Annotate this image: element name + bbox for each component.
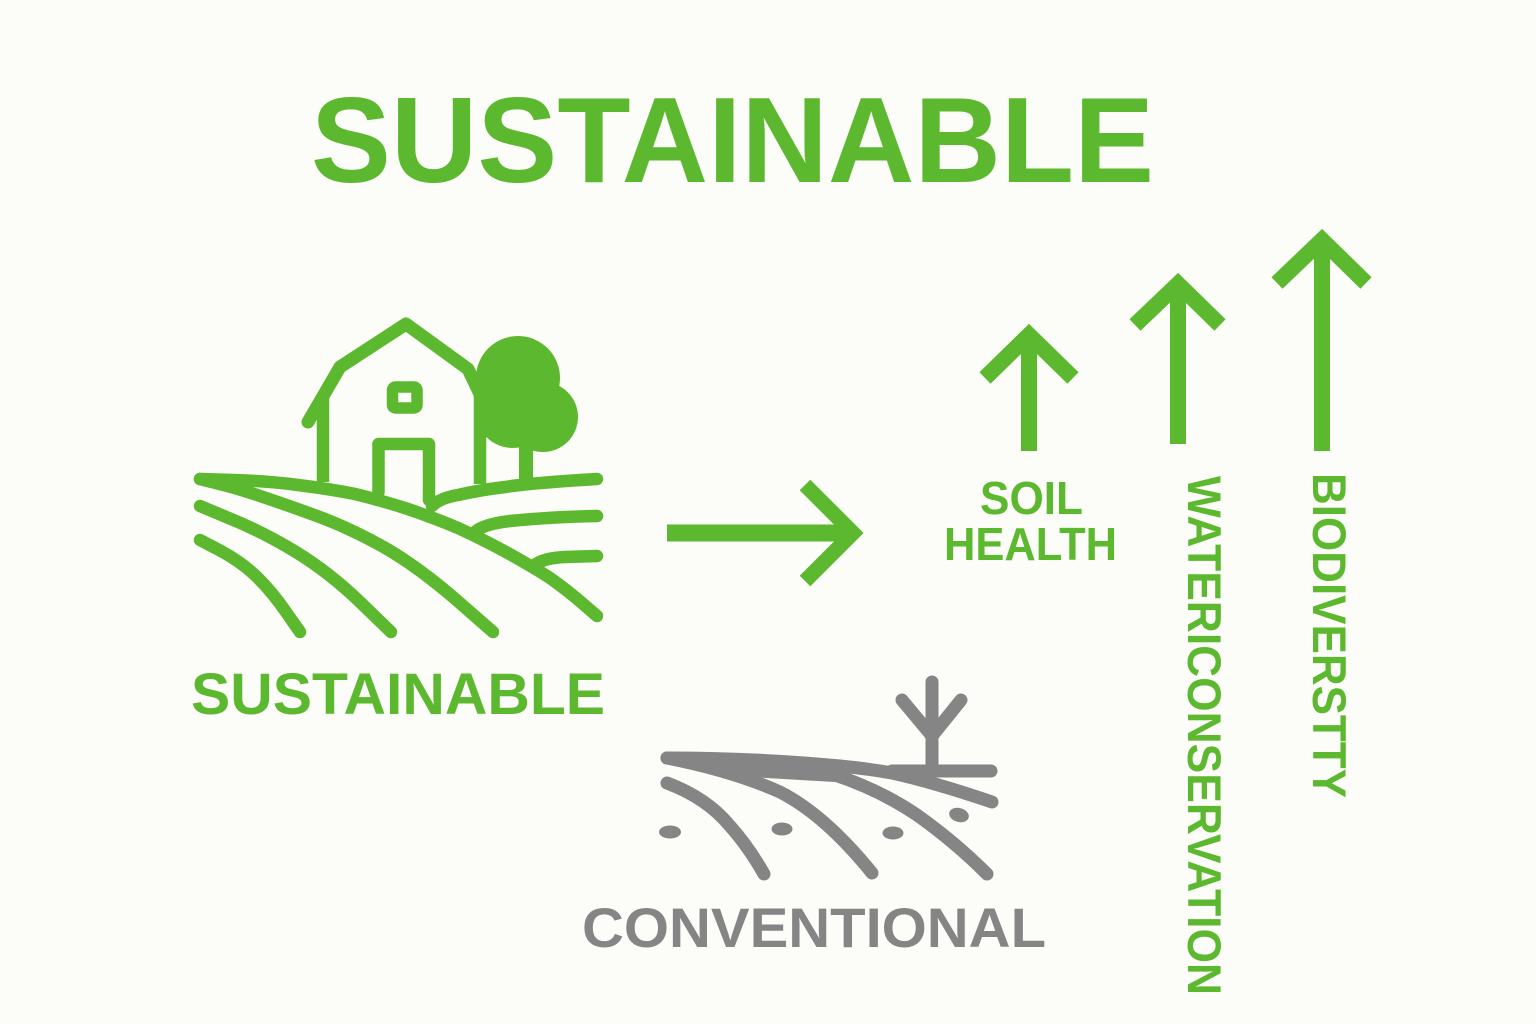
arrow: soil health up	[985, 335, 1073, 451]
bare plant	[902, 682, 961, 770]
barn door	[378, 444, 429, 500]
label: sustainable: SUSTAINABLE	[191, 662, 605, 727]
arrow: right	[667, 485, 853, 581]
icon: conventional field with bare plant	[659, 682, 992, 874]
stones	[659, 806, 970, 840]
label: conventional: CONVENTIONAL	[582, 896, 1046, 959]
label: soil health	[944, 472, 1117, 570]
icon: sustainable farm with barn and tree	[200, 324, 597, 632]
label: water conservation: WATERICONSERVATION	[1178, 476, 1231, 995]
label: soil health: HEALTH	[944, 518, 1117, 570]
label: biodiversity: BIODIVERSTTY	[1303, 473, 1356, 798]
barn roof	[308, 324, 480, 422]
barn window	[392, 387, 417, 408]
ground lines	[667, 758, 992, 802]
arrow: water conservation up	[1135, 284, 1220, 444]
label: soil health: SOIL	[980, 472, 1083, 524]
title: SUSTAINABLE	[311, 72, 1154, 208]
arrow: biodiversity up	[1277, 240, 1366, 451]
tree	[475, 336, 578, 480]
field furrows	[200, 479, 597, 616]
ground wedge	[667, 758, 835, 777]
barn walls	[323, 394, 480, 484]
